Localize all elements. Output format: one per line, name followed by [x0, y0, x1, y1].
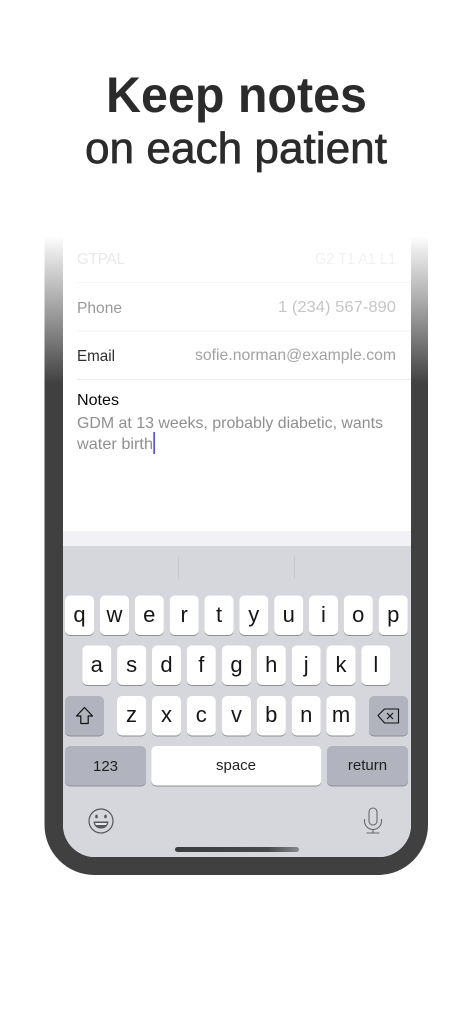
keyboard [63, 546, 411, 857]
keys row 2: k [336, 652, 348, 677]
phone frame [44, 236, 428, 875]
text cursor [153, 432, 155, 454]
notes: GDM at 13 weeks, probably diabetic, wants [77, 415, 383, 432]
keys row 2: s [126, 652, 137, 677]
row: GTPAL [77, 251, 396, 268]
row: GTPAL: GTPAL [77, 251, 125, 268]
keys row 1: w [106, 602, 123, 627]
light strip above keyboard [63, 531, 411, 546]
keys row 3 [65, 696, 408, 736]
row: phone: 1 (234) 567-890 [278, 299, 396, 316]
keys row 1: q [73, 602, 86, 627]
keys row 2: h [265, 652, 277, 677]
keys row 1: t [216, 602, 222, 627]
keys row 2: l [373, 652, 378, 677]
row: phone [77, 299, 396, 317]
keys row 3: n [300, 702, 312, 727]
keys row 1: y [248, 602, 259, 627]
row: email: Email [77, 348, 115, 365]
keys row 3: x [161, 702, 172, 727]
phone mockup [44, 236, 428, 875]
row: email [77, 347, 396, 365]
icon: microphone [364, 808, 382, 833]
keys row 4: space [216, 757, 256, 774]
title [85, 67, 387, 173]
notes: water birth [76, 436, 153, 453]
heading: on each patient: on each patient [85, 124, 387, 173]
keys row 3: c [196, 702, 207, 727]
icon: backspace [378, 709, 398, 723]
keys row 1: r [181, 602, 188, 627]
keys row 4: 123 [93, 758, 118, 775]
row: email: sofie.norman@example.com [195, 347, 396, 364]
keys row 2: f [198, 652, 205, 677]
keyboard background [63, 546, 411, 857]
keys row 3: m [332, 702, 350, 727]
icon: shift [76, 708, 92, 724]
keys row 3: v [231, 702, 242, 727]
keys row 2: g [230, 652, 243, 677]
panel: patient form [76, 251, 411, 454]
row: GTPAL: G2 T1 A1 L1 [315, 251, 396, 268]
keys row 2: a [91, 652, 104, 677]
phone screen [63, 236, 411, 857]
heading: Keep notes: Keep notes [106, 67, 367, 123]
notes [76, 392, 383, 454]
keys row 2: d [160, 652, 173, 677]
keys row 4: return [348, 757, 387, 774]
keys row 2: j [303, 652, 309, 677]
keys row 1: i [321, 602, 326, 627]
home indicator [175, 847, 299, 852]
icon: emoji [89, 809, 113, 833]
keys row 3: b [265, 702, 277, 727]
keys row 3: z [126, 702, 137, 727]
keys row 4 [65, 746, 408, 786]
keys row 2 [82, 646, 390, 685]
keys row 1: p [387, 602, 399, 627]
notes: Notes [77, 392, 119, 409]
keys row 1: e [143, 602, 155, 627]
keys row 1: u [283, 602, 295, 627]
keys row 1: o [352, 602, 364, 627]
keys row 1 [65, 596, 408, 635]
row: phone: Phone [77, 300, 122, 317]
